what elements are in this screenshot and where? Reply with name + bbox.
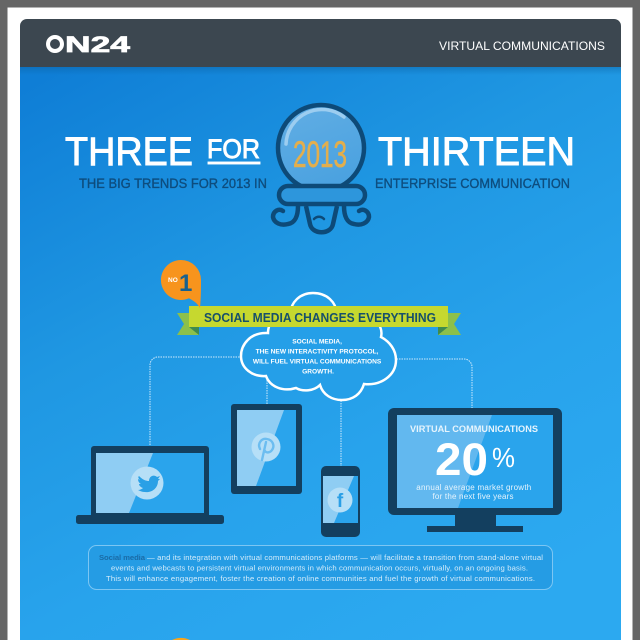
subtitle: ENTERPRISE COMMUNICATION bbox=[375, 175, 570, 191]
tablet bbox=[231, 404, 302, 494]
description box: This will enhance engagement, foster the creation of online communities and fuel the growth of virtual communications. bbox=[106, 574, 535, 583]
icon: pinterest bbox=[252, 432, 280, 462]
cloud text: THE NEW INTERACTIVITY PROTOCOL, bbox=[256, 348, 379, 356]
stat caption: for the next five years bbox=[432, 492, 514, 501]
description box bbox=[88, 546, 552, 590]
subtitle bbox=[79, 175, 570, 191]
icon: crystal ball: 2013 bbox=[293, 134, 347, 175]
number badge: 1 bbox=[179, 270, 192, 297]
description box: events and webcasts to persistent virtual environments in which communication occurs, virtually, on an ongoing basis. bbox=[111, 564, 528, 572]
logo bbox=[48, 32, 131, 57]
subtitle: THE BIG TRENDS FOR 2013 IN bbox=[79, 175, 267, 191]
logo: N24 bbox=[65, 32, 131, 57]
monitor bbox=[388, 408, 562, 532]
description box: Social media bbox=[99, 553, 146, 562]
phone bbox=[321, 466, 360, 537]
cloud text: SOCIAL MEDIA, bbox=[292, 338, 342, 346]
icon: crystal ball bbox=[273, 105, 369, 232]
title: THREE bbox=[65, 130, 193, 174]
cloud callout bbox=[241, 293, 396, 400]
laptop bbox=[76, 446, 224, 524]
icon: facebook: f bbox=[337, 491, 344, 512]
header bar bbox=[20, 19, 621, 67]
number badge: NO bbox=[168, 277, 178, 284]
stat label: VIRTUAL COMMUNICATIONS bbox=[410, 424, 538, 435]
icon: twitter bbox=[130, 466, 164, 500]
title: FOR bbox=[207, 134, 260, 164]
stat value: 20 bbox=[435, 434, 488, 485]
stat value: % bbox=[492, 442, 515, 473]
stat value bbox=[435, 434, 515, 485]
ribbon heading bbox=[177, 306, 461, 335]
description box: — and its integration with virtual communications platforms — will facilitate a transition from stand-alone virtual bbox=[147, 553, 543, 562]
cloud text: GROWTH. bbox=[302, 368, 334, 376]
next section badge bbox=[172, 638, 190, 640]
title bbox=[65, 130, 575, 174]
header label: VIRTUAL COMMUNICATIONS bbox=[439, 39, 605, 53]
dotted connector lines bbox=[150, 357, 472, 466]
number badge bbox=[161, 260, 201, 308]
cloud text: WILL FUEL VIRTUAL COMMUNICATIONS bbox=[253, 358, 382, 366]
stat caption: annual average market growth bbox=[416, 483, 531, 492]
ribbon heading: SOCIAL MEDIA CHANGES EVERYTHING bbox=[204, 311, 436, 325]
title: THIRTEEN bbox=[378, 130, 575, 174]
